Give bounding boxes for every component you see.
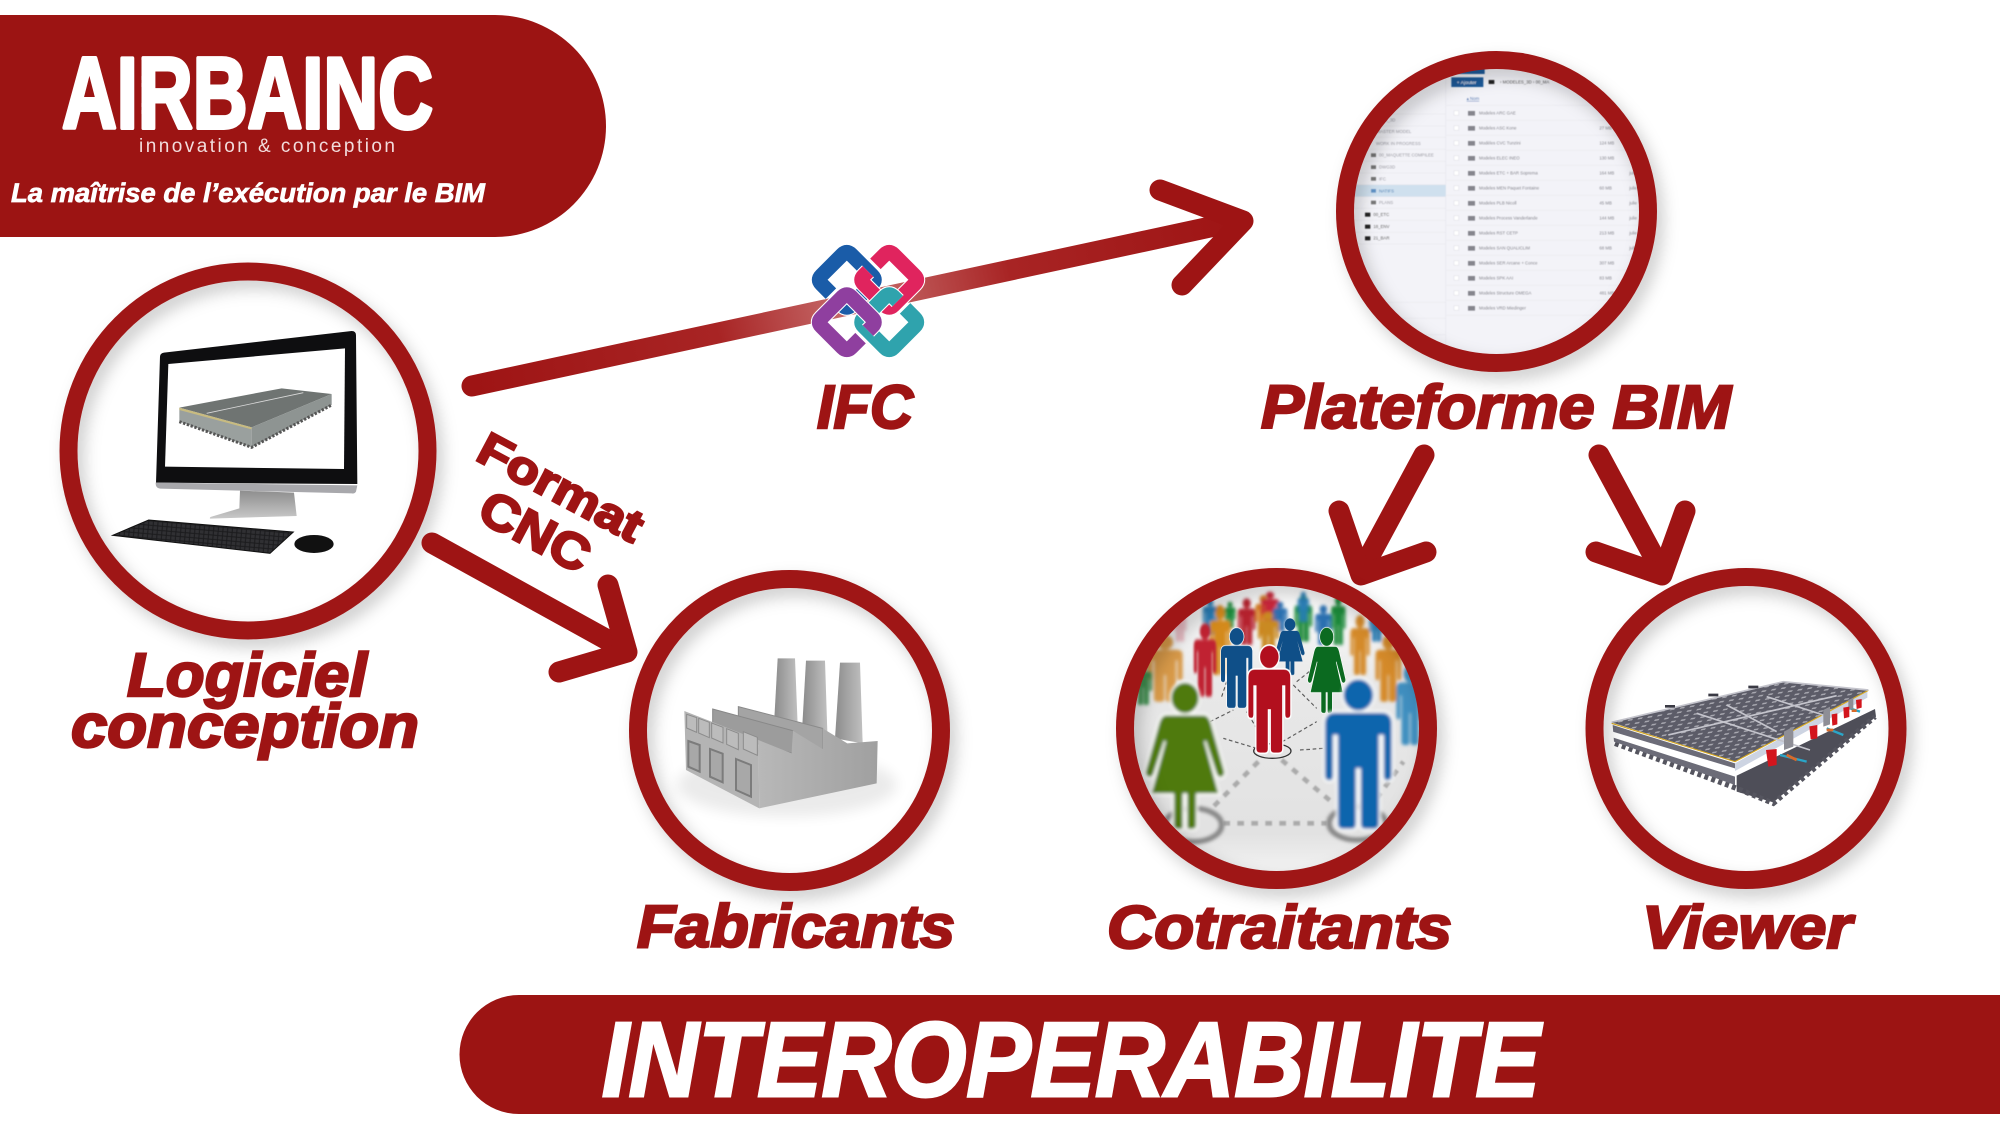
label: format CNC (469, 422, 653, 584)
ring (1345, 60, 1648, 363)
file rows: Modeles SPK AAI (1479, 276, 1513, 281)
file rows: 83 MB (1599, 276, 1612, 281)
mid figures (1194, 618, 1346, 758)
banner background (460, 995, 2000, 1114)
sidebar: MASTER MODEL (1377, 129, 1412, 134)
screenshot toolbar (1451, 68, 1549, 101)
chimneys (774, 658, 863, 743)
roof (1612, 682, 1868, 762)
file rows: julie (1628, 216, 1638, 221)
panel: plateforme BIM (1261, 60, 1732, 441)
file rows: 307 MB (1599, 261, 1614, 266)
header background (0, 15, 606, 237)
main wall left (684, 711, 759, 808)
panel: fabricants (637, 579, 955, 960)
label: IFC: IFC (817, 373, 914, 441)
file rows: Modeles SAN QUALICLIM (1479, 246, 1530, 251)
arrow: plateforme to cotraitants (1339, 455, 1426, 575)
illustration: people network (1127, 582, 1427, 878)
file rows: Modeles Process Vanderlande (1479, 216, 1538, 221)
file rows: Modeles PLB Nicoll (1479, 201, 1517, 206)
logo wordmark: AIRBAINC (62, 38, 433, 150)
file rows: Modeles ETC + BAR Soprema (1479, 171, 1538, 176)
sidebar: ES_3D (1382, 118, 1395, 123)
file rows: Modeles Structure OMEGA (1479, 291, 1532, 296)
footer banner (460, 995, 2000, 1119)
sidebar: BIM (1387, 105, 1395, 110)
file rows: Modeles VRD Miedinger (1479, 306, 1526, 311)
roof joints (1612, 682, 1868, 750)
monitor chin (156, 483, 357, 493)
lower windows (688, 741, 751, 797)
monitor stand (210, 491, 297, 519)
file rows: Modeles SER Arcane + Conce (1479, 261, 1538, 266)
label: conception: conception (71, 692, 419, 760)
file rows: 481 MB (1599, 291, 1614, 296)
floor (1134, 618, 1419, 871)
screenshot: file list (1350, 63, 1643, 360)
platform (1737, 709, 1876, 802)
sidebar: DWG3D (1379, 165, 1395, 170)
ring (68, 272, 428, 630)
concrete docks (1784, 698, 1853, 750)
illustration: building model (1612, 682, 1876, 803)
file rows: Modeles MEN Paquet Fontaine (1479, 186, 1540, 191)
file rows (1446, 105, 1640, 315)
file rows: 45 MB (1599, 201, 1612, 206)
monitor bezel (156, 331, 357, 484)
screenshot toolbar: ▴ Nom (1467, 96, 1480, 101)
icon: IFC logo (819, 252, 917, 350)
sidebar: IFC (1379, 176, 1386, 181)
monitor screen (165, 348, 345, 469)
file rows: julie (1628, 201, 1638, 206)
screenshot toolbar: + Ajouter (1457, 80, 1477, 86)
file rows: 144 MB (1599, 216, 1614, 221)
label: logiciel: Logiciel (127, 641, 368, 709)
near figures (1145, 678, 1393, 842)
file rows: Modeles ARC GAE (1479, 111, 1516, 116)
icon: desktop computer (113, 331, 357, 553)
sidebar: 21_BAR (1373, 236, 1389, 241)
screenshot toolbar: › MODELES_3D › 00_MA (1500, 80, 1549, 85)
near dashed network lines (1213, 760, 1403, 823)
file rows: 68 MB (1599, 246, 1612, 251)
back roof row (738, 707, 823, 750)
red blocks (1766, 699, 1862, 767)
file rows: 164 MB (1599, 171, 1614, 176)
panel: viewer (1594, 577, 1898, 961)
upper panes (687, 714, 757, 755)
panel: cotraitants (1107, 577, 1452, 961)
file rows: julie (1628, 171, 1638, 176)
label: cotraitants: Cotraitants (1107, 894, 1452, 961)
ring (1125, 577, 1428, 880)
arrow: logiciel to plateforme (472, 190, 1243, 386)
format: Format (469, 422, 653, 552)
CNC: CNC (470, 479, 600, 584)
file rows: Modeles ASC Kone (1479, 126, 1517, 131)
arrow: logiciel to fabricants (432, 543, 627, 672)
panel: logiciel conception (68, 272, 428, 760)
file rows: 213 MB (1599, 231, 1614, 236)
ring (1594, 577, 1898, 880)
mid dashed network lines (1210, 668, 1323, 750)
banner title: INTEROPERABILITE (602, 1001, 1543, 1119)
header panel (0, 15, 606, 237)
file rows: Modeles RST CETP (1479, 231, 1518, 236)
file rows: 124 MB (1599, 141, 1614, 146)
sidebar (1355, 118, 1446, 242)
roof edge stripe (1612, 690, 1868, 762)
wall layers (1613, 725, 1735, 785)
loading bays blue orange (1780, 708, 1860, 762)
mouse (294, 535, 334, 553)
keyboard (113, 520, 293, 553)
sidebar: PLANS (1379, 200, 1393, 205)
file rows: Modèles CVC Tunzini (1479, 141, 1521, 146)
screenshot background (1350, 63, 1643, 360)
logo vertical dash-dot line (138, 33, 142, 143)
icon: factory (677, 658, 897, 817)
factory shadow (677, 753, 897, 817)
main wall right (758, 728, 878, 808)
label: plateforme BIM: Plateforme BIM (1261, 373, 1732, 441)
tagline: La maîtrise de l’exécution par le BIM (11, 178, 486, 208)
pier teeth (1615, 717, 1875, 803)
file rows: julie (1628, 186, 1638, 191)
sidebar: WORK IN PROGRESS (1376, 141, 1421, 146)
roof units (1665, 686, 1758, 708)
far crowd (1135, 592, 1424, 745)
middle roof row (713, 709, 793, 753)
file rows: Modeles ELEC INEO (1479, 156, 1520, 161)
file rows: 60 MB (1599, 186, 1612, 191)
arrow: plateforme to viewer (1596, 455, 1685, 575)
sidebar: 18_ENV (1373, 224, 1390, 229)
file rows: julie (1628, 246, 1638, 251)
label: fabricants: Fabricants (637, 893, 955, 960)
sidebar: NATIFS (1379, 188, 1394, 193)
sidebar: 00_MAQUETTE COMPILEE (1379, 153, 1434, 158)
file rows: julie (1628, 231, 1638, 236)
sidebar: 00_ETC (1373, 212, 1389, 217)
ring (638, 579, 941, 882)
logo subtitle: innovation & conception (139, 136, 395, 157)
label: viewer: Viewer (1642, 894, 1856, 961)
file rows: 130 MB (1599, 156, 1614, 161)
building on screen (179, 388, 332, 447)
file rows: 27 MB (1599, 126, 1612, 131)
